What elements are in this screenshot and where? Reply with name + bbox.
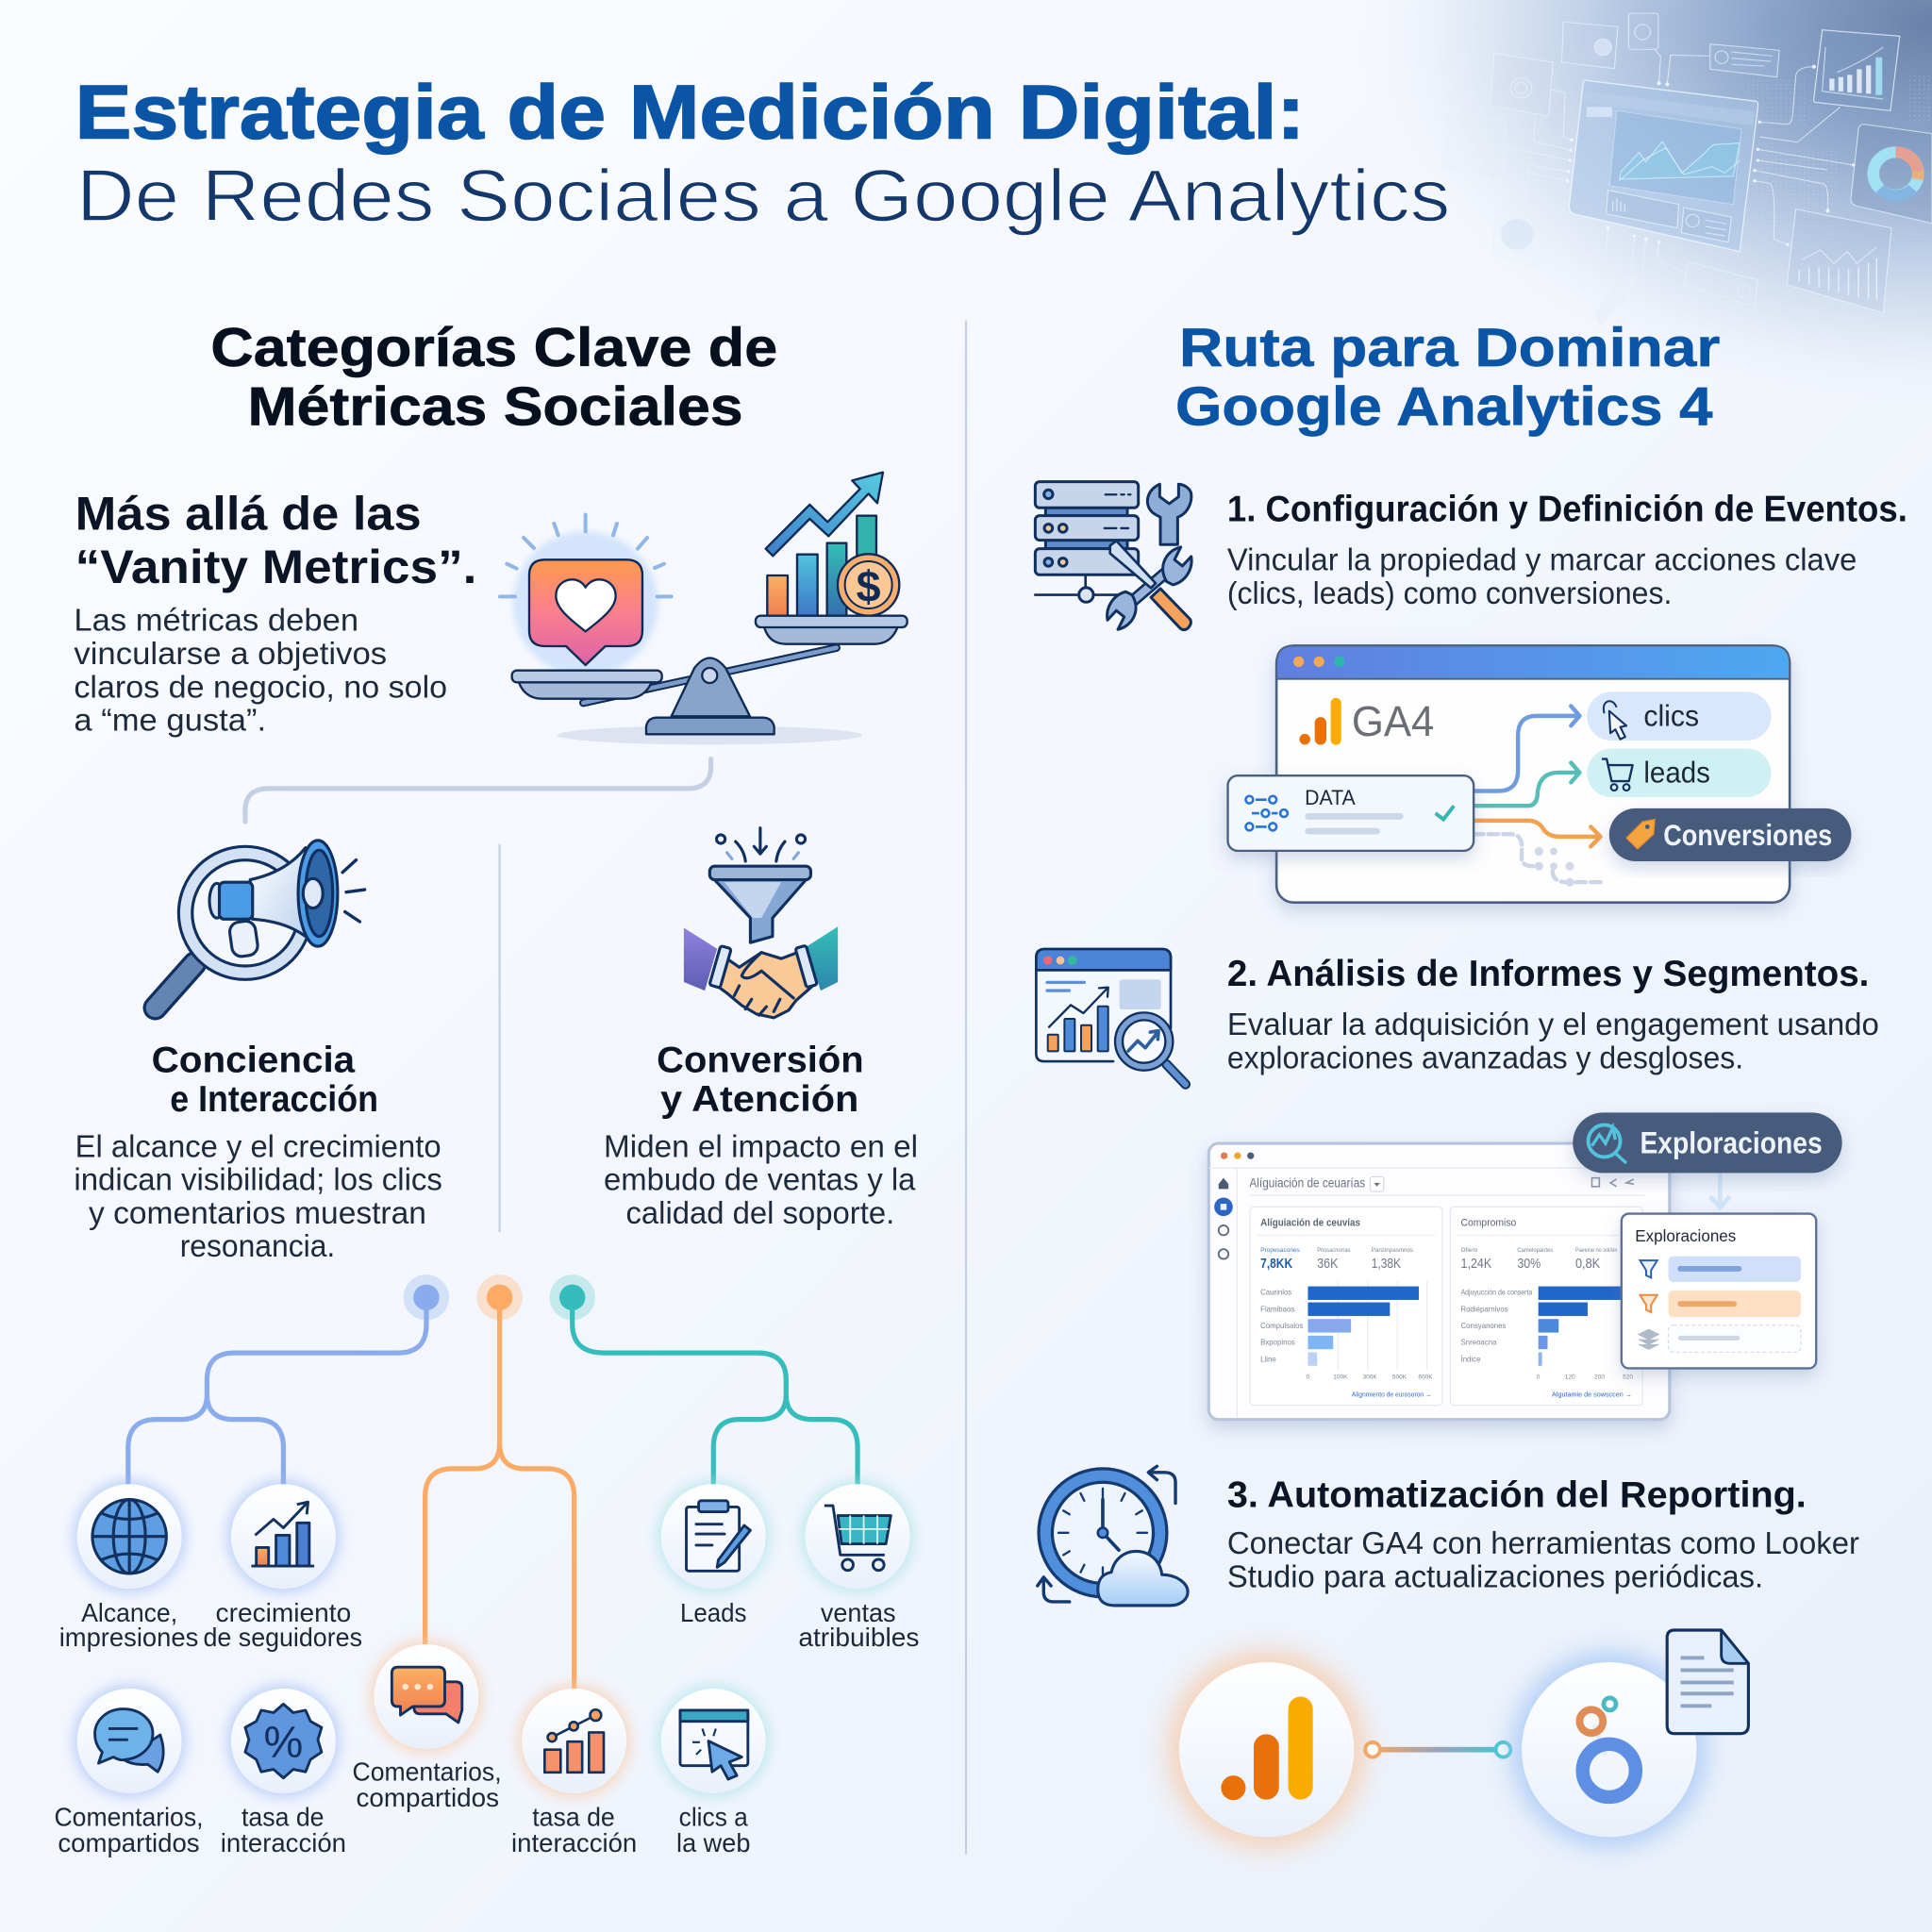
pill: leads [1587, 748, 1772, 797]
icon: conversion funnel and handshake [684, 828, 838, 1018]
metric: alcance impresiones [59, 1480, 198, 1652]
metric: tasa de interacción orange [511, 1684, 637, 1857]
card: compromiso chart: Ofiero [1461, 1247, 1478, 1254]
metric: ventas atribuibles [798, 1480, 919, 1652]
heading: social metric categories: Métricas Sociales [248, 377, 743, 438]
card: compromiso chart: Algutamie de sowsccen → [1552, 1391, 1632, 1398]
arrow: explorations down [1710, 1173, 1730, 1208]
card: adquisición chart: Caurinlos [1260, 1289, 1291, 1297]
card: adquisición chart: 600K [1418, 1374, 1433, 1381]
card: adquisición chart: 500K [1392, 1374, 1407, 1381]
tree branch: awareness [128, 1274, 449, 1491]
metric: crecimiento de seguidores: de seguidores [204, 1623, 362, 1652]
illustration: digital analytics dashboard [1232, 0, 1932, 419]
text block: vanity metrics: a “me gusta”. [74, 704, 266, 739]
text block: vanity metrics: Las métricas deben [74, 604, 358, 639]
metric: tasa de interacción orange: tasa de [532, 1803, 615, 1832]
card: compromiso chart [1450, 1207, 1642, 1406]
metric: crecimiento de seguidores: crecimiento [216, 1598, 351, 1627]
illustration: GA4 reports window: Alíguiación de ceuarías [1249, 1175, 1365, 1190]
text block: awareness and interaction: Conciencia [152, 1040, 356, 1080]
metric: alcance impresiones: Alcance, [81, 1598, 177, 1627]
card: compromiso chart: 120 [1565, 1374, 1575, 1381]
card: compromiso chart: Consyanones [1461, 1322, 1506, 1330]
card: adquisición chart: Lline [1260, 1355, 1276, 1363]
card: adquisición chart: Alignmiento de eurosoron → [1352, 1391, 1432, 1398]
text block: vanity metrics: Más allá de las [75, 488, 422, 541]
text block: awareness and interaction: resonancia. [180, 1229, 335, 1264]
text block: step 1: (clics, leads) como conversiones. [1227, 576, 1672, 611]
card: adquisición chart: Alíguiación de ceuvías [1260, 1218, 1360, 1229]
text block: step 3 [1227, 1474, 1859, 1594]
illustration: GA4 event window [1228, 645, 1851, 903]
category divider [499, 844, 501, 1232]
text block: step 2: Evaluar la adquisición y el engagement usando [1227, 1008, 1879, 1042]
metric: comentarios compartidos blue: compartidos [58, 1828, 200, 1857]
icon: megaphone and magnifier [156, 841, 365, 1008]
card: adquisición chart: 7,8KK [1260, 1257, 1293, 1272]
card: compromiso chart: 520 [1623, 1374, 1633, 1381]
pill: exploraciones: Exploraciones [1640, 1125, 1823, 1160]
metric: crecimiento de seguidores [204, 1480, 362, 1652]
icon: GA4 logo: GA4 [1352, 697, 1434, 745]
metric: leads: Leads [680, 1598, 747, 1627]
card: compromiso chart: Índice [1461, 1355, 1480, 1363]
tree branch: conversion middle [425, 1274, 575, 1698]
card: adquisición chart: 100K [1333, 1374, 1348, 1381]
pill: clics [1587, 691, 1772, 741]
metric: tasa de interacción blue: % [264, 1717, 303, 1767]
column divider [965, 321, 967, 1855]
icon: GA4 logo [1299, 697, 1434, 745]
card: compromiso chart: Snreoacna [1461, 1339, 1497, 1347]
text block: vanity metrics: vincularse a objetivos [74, 637, 387, 672]
icon: balance scale with like and revenue: $ [857, 561, 881, 610]
text block: conversion and attention: Conversión [657, 1040, 864, 1080]
metric: ventas atribuibles: atribuibles [798, 1623, 919, 1652]
arrows: data flows [1474, 706, 1605, 882]
card: explorations list [1622, 1214, 1816, 1368]
metric: comentarios compartidos orange: compartidos [356, 1783, 499, 1812]
icon: balance scale with like and revenue [500, 473, 908, 744]
text block: vanity metrics: “Vanity Metrics”. [75, 541, 476, 593]
metric: comentarios compartidos orange [353, 1640, 502, 1812]
card: adquisición chart: Priosacnorras [1317, 1247, 1351, 1254]
pill: leads: leads [1643, 756, 1710, 789]
metric: comentarios compartidos orange: Comentarios, [353, 1757, 502, 1786]
metric: ventas atribuibles: ventas [821, 1598, 896, 1627]
icon: clock with cloud [1038, 1466, 1188, 1606]
text block: awareness and interaction: y comentarios muestran [89, 1196, 426, 1231]
heading: GA4 roadmap: Google Analytics 4 [1175, 377, 1713, 438]
card: data source [1228, 775, 1474, 851]
metric: tasa de interacción blue: interacción [221, 1828, 346, 1857]
text block: step 2: exploraciones avanzadas y desgloses. [1227, 1041, 1743, 1075]
card: adquisición chart: Bxpopinos [1260, 1339, 1295, 1347]
panel: social metrics [54, 318, 919, 1857]
text block: vanity metrics: claros de negocio, no solo [74, 670, 447, 705]
card: compromiso chart: Paveine no solAin [1575, 1247, 1618, 1254]
illustration: GA4 reports window [1208, 1112, 1842, 1420]
text block: step 2 [1227, 954, 1879, 1075]
metric: comentarios compartidos blue [54, 1684, 204, 1857]
pill: conversiones [1609, 808, 1851, 861]
text block: step 3: Conectar GA4 con herramientas como Looker [1227, 1526, 1859, 1561]
logo: Looker Studio [1512, 1653, 1707, 1847]
text block: step 1: Vincular la propiedad y marcar acciones clave [1227, 543, 1857, 578]
icon: server and tools [1035, 482, 1191, 630]
text block: conversion and attention: calidad del soporte. [626, 1196, 894, 1231]
pill: exploraciones [1573, 1112, 1842, 1173]
heading: GA4 roadmap [1175, 318, 1720, 438]
text block: vanity metrics [74, 488, 476, 739]
card: compromiso chart: Rodiéparnivos [1461, 1305, 1508, 1313]
icon: report window with magnifier [1036, 949, 1186, 1084]
text block: awareness and interaction [74, 1040, 442, 1264]
card: compromiso chart: Camelopantes [1517, 1247, 1554, 1254]
card: explorations list: Exploraciones [1635, 1226, 1736, 1245]
connector: vanity to categories [245, 759, 711, 822]
card: adquisición chart: Panzinpasmnos [1372, 1247, 1414, 1254]
card: adquisición chart: 36K [1317, 1257, 1339, 1272]
card: compromiso chart: 0 [1537, 1374, 1541, 1381]
panel: GA4 roadmap [1035, 318, 1907, 1848]
metric: clics a la web [657, 1684, 770, 1857]
text block: awareness and interaction: indican visibilidad; los clics [74, 1163, 442, 1198]
metric: clics a la web: clics a [679, 1803, 749, 1832]
icon: report document [1667, 1630, 1748, 1734]
heading: GA4 roadmap: Ruta para Dominar [1179, 318, 1720, 378]
metric: tasa de interacción orange: interacción [511, 1828, 637, 1857]
text block: conversion and attention: y Atención [660, 1079, 858, 1120]
metric: comentarios compartidos blue: Comentarios, [54, 1803, 204, 1832]
metric: tasa de interacción blue: tasa de [242, 1803, 325, 1832]
card: compromiso chart: 0,8K [1575, 1257, 1600, 1272]
text block: conversion and attention [604, 1040, 918, 1231]
heading: social metric categories [210, 318, 777, 438]
metric: tasa de interacción blue [221, 1684, 346, 1857]
tree branch: attention [550, 1274, 858, 1491]
card: adquisición chart: Propesacones [1260, 1247, 1301, 1254]
metric: leads [657, 1480, 770, 1627]
text block: step 3: Studio para actualizaciones periódicas. [1227, 1559, 1763, 1594]
text block: conversion and attention: embudo de ventas y la [604, 1163, 916, 1198]
card: compromiso chart: Adjuyucción de conserta [1461, 1289, 1533, 1297]
text block: step 3: 3. Automatización del Reporting. [1227, 1474, 1807, 1515]
card: adquisición chart: Compulsalos [1260, 1322, 1303, 1330]
card: compromiso chart: Compromiso [1461, 1218, 1516, 1229]
text block: awareness and interaction: e Interacción [170, 1079, 378, 1120]
card: compromiso chart: 1,24K [1461, 1257, 1492, 1272]
text block: step 1 [1227, 489, 1907, 611]
card: adquisición chart: 1,38K [1372, 1257, 1401, 1272]
logo: Google Analytics [1168, 1651, 1365, 1848]
sidebar icons [1214, 1178, 1233, 1259]
heading: social metric categories: Categorías Clave de [210, 318, 777, 378]
card: compromiso chart: 30% [1517, 1257, 1541, 1272]
card: adquisición chart: Flamibaos [1260, 1305, 1294, 1313]
text block: conversion and attention: Miden el impacto en el [604, 1129, 918, 1164]
metric: clics a la web: la web [676, 1828, 750, 1857]
card: adquisición chart: 0 [1306, 1374, 1309, 1381]
text block: step 2: 2. Análisis de Informes y Segmentos. [1227, 954, 1869, 994]
card: adquisición chart [1250, 1207, 1442, 1406]
card: adquisición chart: 300K [1363, 1374, 1377, 1381]
card: compromiso chart: 200 [1594, 1374, 1605, 1381]
title: Estrategia de Medición Digital: [75, 70, 1305, 155]
metric: alcance impresiones: impresiones [59, 1623, 198, 1652]
pill: conversiones: Conversiones [1663, 819, 1832, 852]
card: data source: DATA [1305, 786, 1356, 809]
connector: GA4 to Looker Studio [1365, 1742, 1510, 1757]
text block: awareness and interaction: El alcance y el crecimiento [75, 1129, 441, 1164]
pill: clics: clics [1643, 699, 1699, 732]
title: De Redes Sociales a Google Analytics [76, 154, 1450, 237]
chart: metric tree [54, 1274, 919, 1857]
title [75, 70, 1450, 237]
